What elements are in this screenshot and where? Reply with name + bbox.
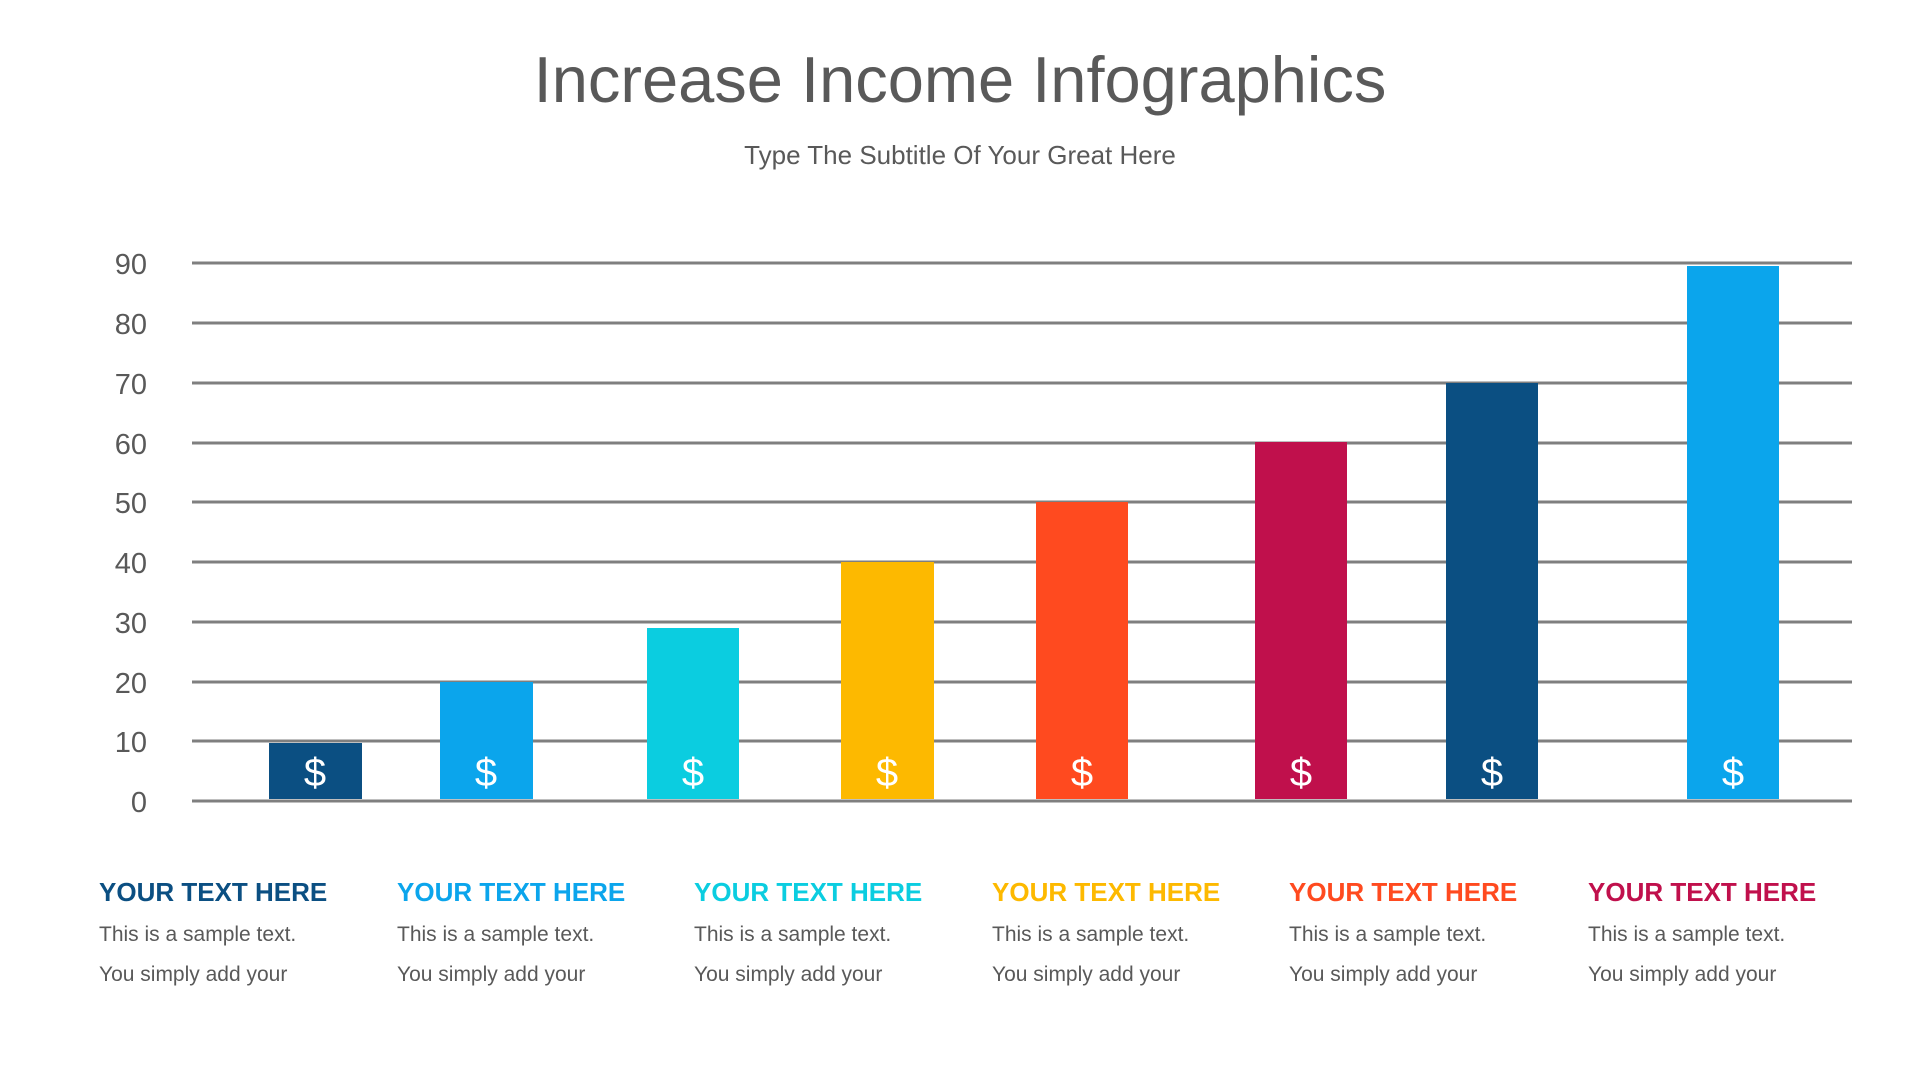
text columns: YOUR TEXT HERE	[694, 877, 922, 907]
text columns: You simply add your	[694, 963, 882, 986]
text columns: YOUR TEXT HERE	[1289, 877, 1517, 907]
text columns: You simply add your	[397, 963, 585, 986]
icons: dollar signs: $	[876, 751, 898, 795]
text columns: This is a sample text.	[397, 923, 594, 946]
y axis labels: 20	[115, 668, 147, 700]
y axis labels: 30	[115, 608, 147, 640]
text columns: You simply add your	[99, 963, 287, 986]
text columns: You simply add your	[1588, 963, 1776, 986]
y axis labels: 60	[115, 429, 147, 461]
title: Increase Income Infographics	[534, 43, 1386, 116]
icons: dollar signs: $	[1071, 751, 1093, 795]
text columns: You simply add your	[992, 963, 1180, 986]
y axis labels: 90	[115, 249, 147, 281]
text columns: This is a sample text.	[694, 923, 891, 946]
y axis labels: 0	[131, 787, 147, 819]
icons: dollar signs	[304, 751, 1744, 795]
text columns: You simply add your	[1289, 963, 1477, 986]
icons: dollar signs: $	[1722, 751, 1744, 795]
text columns: This is a sample text.	[99, 923, 296, 946]
text columns: This is a sample text.	[1289, 923, 1486, 946]
y axis labels: 80	[115, 309, 147, 341]
y axis labels: 50	[115, 488, 147, 520]
y axis labels: 40	[115, 548, 147, 580]
subtitle: Type The Subtitle Of Your Great Here	[744, 140, 1176, 170]
bars	[269, 266, 1779, 799]
y axis labels	[115, 249, 147, 819]
icons: dollar signs: $	[475, 751, 497, 795]
text columns: YOUR TEXT HERE	[992, 877, 1220, 907]
icons: dollar signs: $	[1481, 751, 1503, 795]
bar chart	[115, 249, 1852, 819]
icons: dollar signs: $	[682, 751, 704, 795]
y axis labels: 70	[115, 369, 147, 401]
text columns: YOUR TEXT HERE	[99, 877, 327, 907]
text columns	[99, 877, 1816, 986]
text columns: This is a sample text.	[992, 923, 1189, 946]
icons: dollar signs: $	[1290, 751, 1312, 795]
text columns: YOUR TEXT HERE	[397, 877, 625, 907]
text columns: This is a sample text.	[1588, 923, 1785, 946]
y axis labels: 10	[115, 727, 147, 759]
text columns: YOUR TEXT HERE	[1588, 877, 1816, 907]
icons: dollar signs: $	[304, 751, 326, 795]
